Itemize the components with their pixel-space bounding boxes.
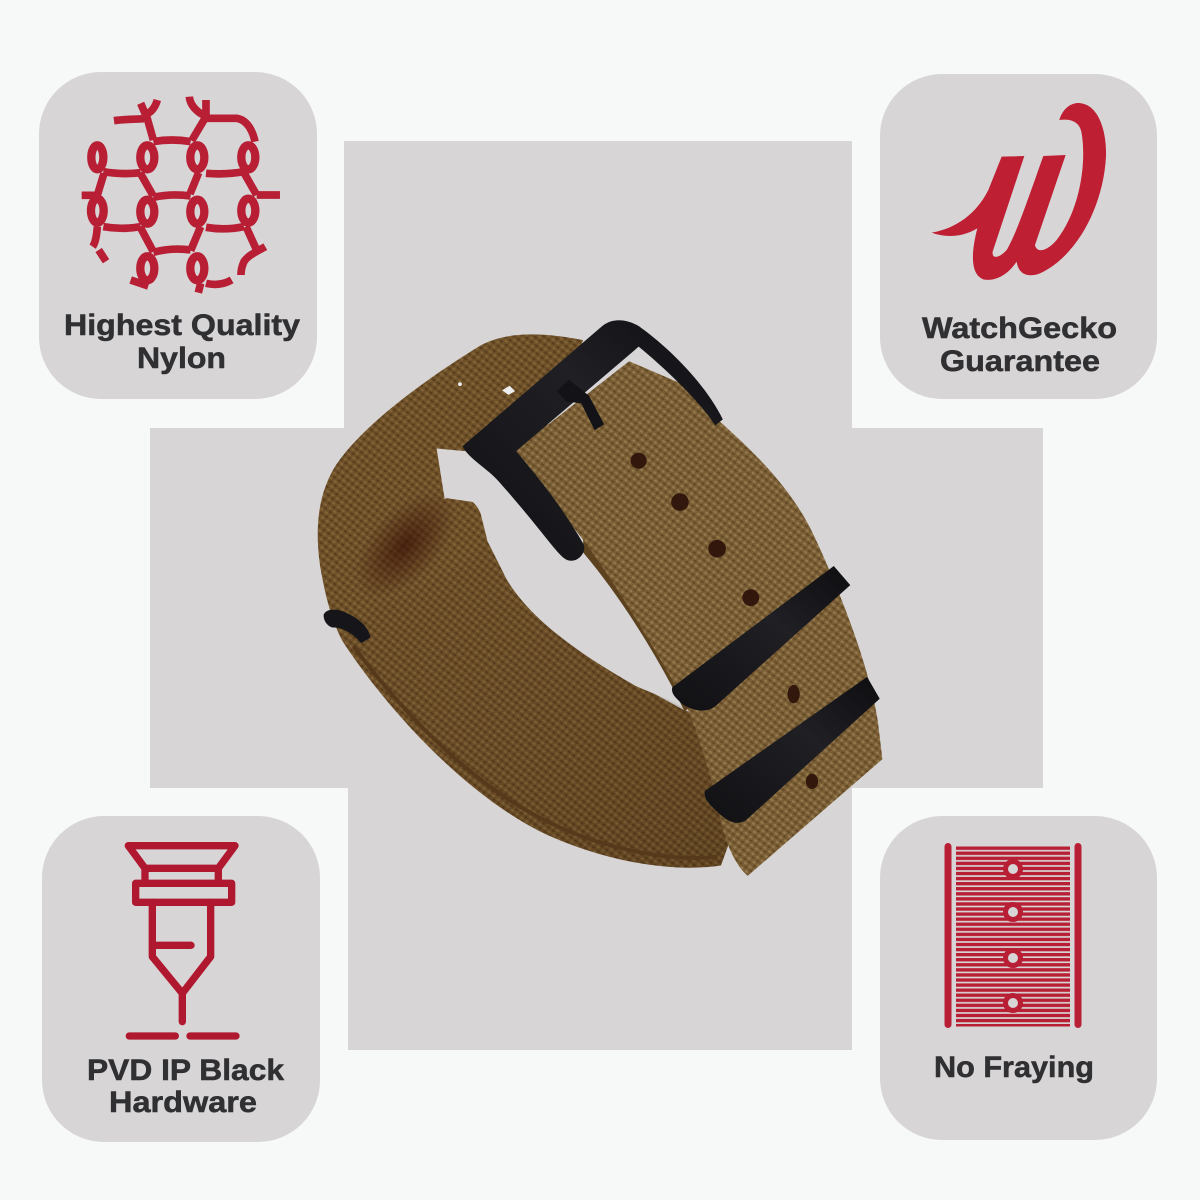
icon: woven strap edges xyxy=(944,843,1082,1028)
strap holes xyxy=(631,453,818,789)
label: highest quality nylon: Highest Quality xyxy=(64,309,300,342)
background panel: cross shape xyxy=(150,141,1043,1050)
keeper loop two xyxy=(705,677,880,823)
back strap loop xyxy=(318,334,740,868)
icon: pvd coating nozzle xyxy=(128,846,236,1036)
icon: nylon mesh xyxy=(82,97,280,293)
front strap side edge xyxy=(583,539,692,711)
label: highest quality nylon xyxy=(64,309,300,375)
label: no fraying: No Fraying xyxy=(934,1051,1094,1084)
lower strap shading xyxy=(342,541,740,868)
card background xyxy=(39,72,317,399)
label: highest quality nylon: Nylon xyxy=(137,342,226,375)
card: watchgecko guarantee xyxy=(880,74,1157,399)
small openings in the strap xyxy=(458,382,515,395)
hole between strap layers xyxy=(437,448,683,706)
card background xyxy=(880,74,1157,399)
buckle xyxy=(463,320,723,561)
shadow under buckle xyxy=(514,361,721,514)
card: no fraying xyxy=(880,816,1157,1140)
keeper loop three xyxy=(324,610,370,643)
lower strap edge rim xyxy=(354,646,717,858)
label: watchgecko guarantee xyxy=(922,312,1117,378)
keeper loop one xyxy=(672,566,850,711)
label: pvd ip black hardware xyxy=(87,1054,284,1119)
card background xyxy=(880,816,1157,1140)
product: nylon watch strap xyxy=(318,320,882,876)
label: pvd ip black hardware: Hardware xyxy=(109,1086,257,1119)
label: watchgecko guarantee: WatchGecko xyxy=(922,312,1117,345)
card background xyxy=(42,816,320,1142)
card: highest quality nylon xyxy=(39,72,317,399)
icon: watchgecko logo xyxy=(932,103,1106,280)
fold shadow xyxy=(336,474,474,616)
label: pvd ip black hardware: PVD IP Black xyxy=(87,1054,284,1087)
card: pvd ip black hardware xyxy=(42,816,320,1142)
buckle pin xyxy=(557,380,604,430)
label: watchgecko guarantee: Guarantee xyxy=(940,345,1100,378)
front strap xyxy=(514,361,882,876)
